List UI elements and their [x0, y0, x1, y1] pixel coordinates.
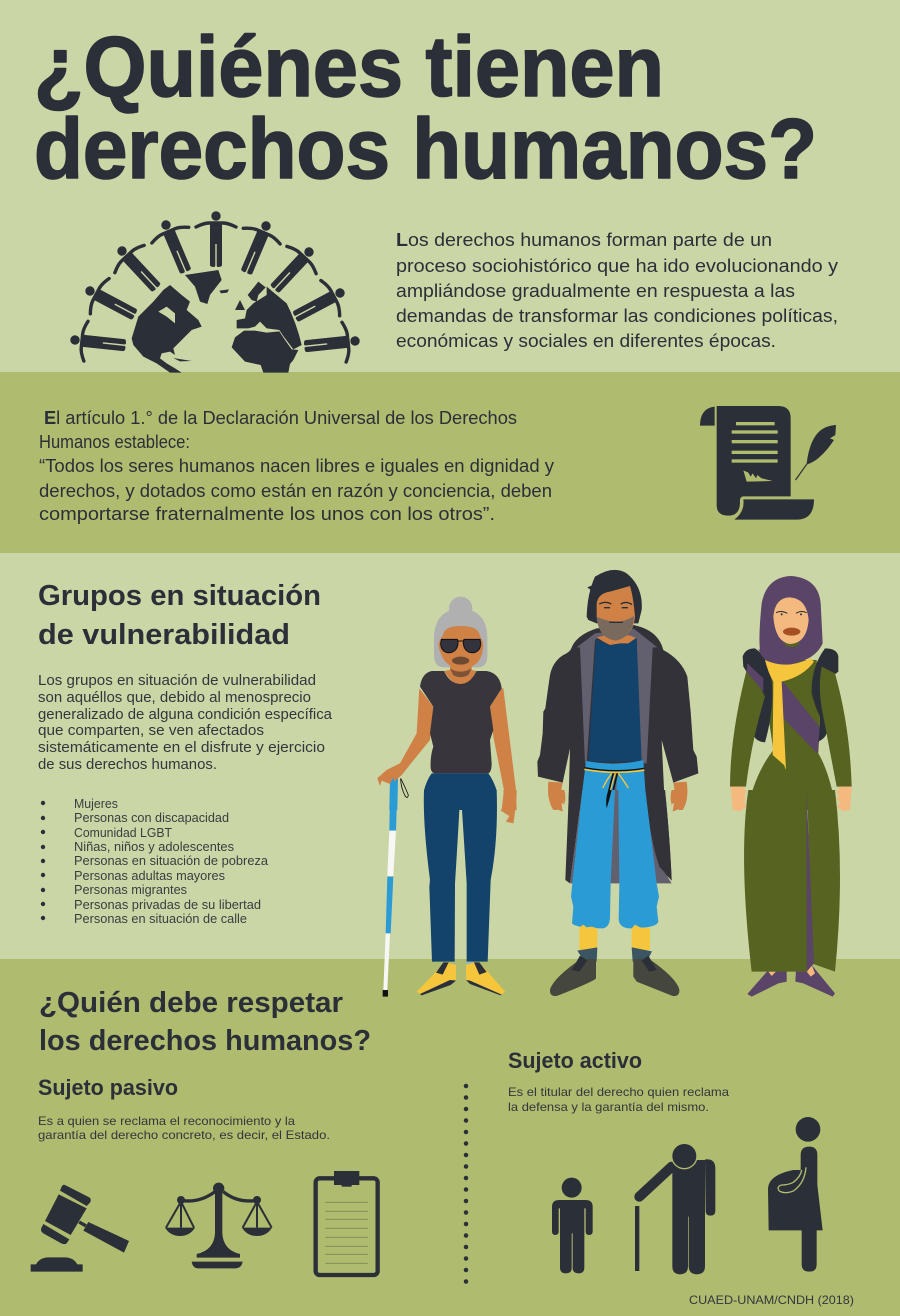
icon: people holding hands around the globe	[68, 211, 362, 373]
heading: ¿Quién debe respetar los derechos humanos?: los derechos humanos?	[39, 1025, 371, 1057]
paragraph: vulnerable groups definition: de sus derechos humanos.	[38, 756, 217, 773]
bulleted list of groups: Personas adultas mayores	[74, 869, 225, 883]
article 1 quotation: “Todos los seres humanos nacen libres e iguales en dignidad y	[39, 456, 554, 476]
icon: gavel	[31, 1185, 129, 1272]
paragraph: vulnerable groups definition: Los grupos en situación de vulnerabilidad	[38, 672, 316, 689]
figure: elderly woman with white cane	[377, 597, 517, 997]
title: ¿Quiénes tienen	[34, 20, 664, 115]
intro paragraph	[396, 230, 838, 351]
icon: older adult with cane	[635, 1143, 715, 1274]
intro paragraph: Los derechos humanos forman parte de un	[396, 230, 772, 250]
panel: sujeto activo: Es el titular del derecho quien reclama	[508, 1085, 729, 1099]
icon: child	[552, 1178, 593, 1273]
bulleted list of groups: Comunidad LGBT	[74, 826, 172, 840]
panel: sujeto activo	[508, 1048, 729, 1114]
panel: sujeto pasivo: Es a quien se reclama el reconocimiento y la	[38, 1114, 295, 1128]
bulleted list of groups: Personas con discapacidad	[74, 811, 229, 825]
bulleted list of groups: Mujeres	[74, 797, 118, 811]
icon: scroll and quill	[700, 406, 836, 520]
article 1 quotation: comportarse fraternalmente los unos con los otros”.	[39, 504, 495, 524]
paragraph: vulnerable groups definition: generalizado de alguna condición específica	[38, 706, 333, 723]
heading: grupos en situación de vulnerabilidad	[38, 580, 321, 651]
article 1 quotation	[39, 408, 554, 524]
heading: ¿Quién debe respetar los derechos humanos?: ¿Quién debe respetar	[39, 987, 343, 1019]
bulleted list of groups: Personas en situación de calle	[74, 912, 247, 926]
panel: sujeto pasivo: garantía del derecho concreto, es decir, el Estado.	[38, 1128, 330, 1142]
figure: woman with hijab and yellow scarf	[730, 576, 852, 997]
intro paragraph: demandas de transformar las condiciones políticas,	[396, 306, 838, 326]
panel: sujeto activo: Sujeto activo	[508, 1048, 642, 1073]
intro paragraph: proceso sociohistórico que ha ido evolucionando y	[396, 256, 838, 276]
heading: grupos en situación de vulnerabilidad: Grupos en situación	[38, 580, 321, 612]
figure: bearded man in long coat	[537, 570, 698, 996]
icon: clipboard	[316, 1171, 378, 1275]
icon: pregnant woman	[768, 1117, 823, 1272]
bulleted list of groups: Personas en situación de pobreza	[74, 854, 268, 868]
bulleted list of groups: Niñas, niños y adolescentes	[74, 840, 234, 854]
heading: ¿Quién debe respetar los derechos humanos?	[39, 987, 371, 1057]
panel: sujeto pasivo	[38, 1075, 330, 1142]
dotted vertical divider	[464, 1086, 468, 1282]
title	[34, 20, 817, 197]
paragraph: vulnerable groups definition	[38, 672, 333, 773]
paragraph: vulnerable groups definition: son aquéllos que, debido al menosprecio	[38, 689, 311, 706]
article 1 quotation: derechos, y dotados como están en razón y conciencia, deben	[39, 481, 552, 501]
article 1 quotation: El artículo 1.° de la Declaración Universal de los Derechos	[44, 408, 517, 428]
panel: sujeto activo: la defensa y la garantía del mismo.	[508, 1100, 709, 1114]
paragraph: vulnerable groups definition: que comparten, se ven afectados	[38, 722, 264, 739]
bulleted list of groups	[41, 797, 268, 926]
intro paragraph: económicas y sociales en diferentes épocas.	[396, 331, 776, 351]
panel: sujeto pasivo: Sujeto pasivo	[38, 1075, 178, 1100]
article 1 quotation: Humanos establece:	[39, 432, 190, 452]
paragraph: vulnerable groups definition: sistemáticamente en el disfrute y ejercicio	[38, 739, 325, 756]
bulleted list of groups: Personas migrantes	[74, 883, 187, 897]
source credit: CUAED-UNAM/CNDH (2018)	[689, 1293, 854, 1307]
intro paragraph: ampliándose gradualmente en respuesta a las	[396, 281, 795, 301]
bulleted list of groups: Personas privadas de su libertad	[74, 898, 261, 912]
icon: scales of justice	[165, 1183, 272, 1268]
title: derechos humanos?	[34, 102, 817, 197]
heading: grupos en situación de vulnerabilidad: de vulnerabilidad	[38, 619, 290, 651]
